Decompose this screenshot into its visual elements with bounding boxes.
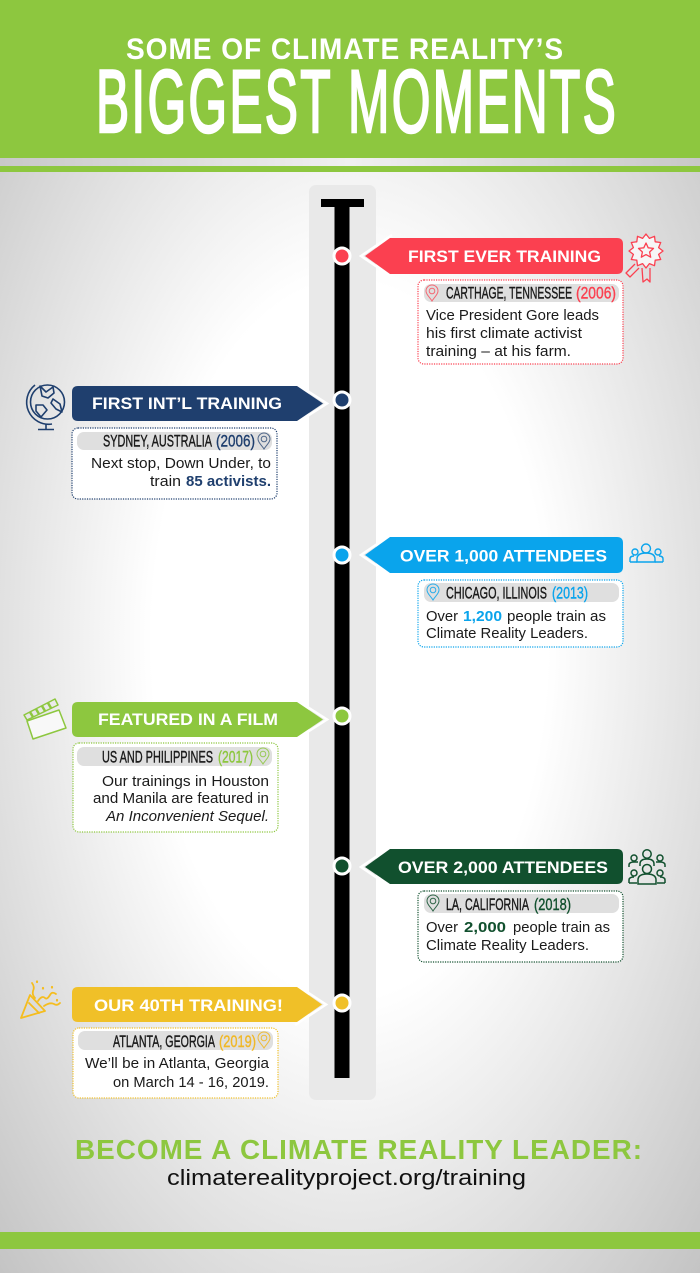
location pill xyxy=(424,894,619,913)
info box xyxy=(418,891,623,962)
location: SYDNEY, AUSTRALIA xyxy=(103,432,212,450)
description: people train as xyxy=(513,920,610,936)
description: his first climate activist xyxy=(426,326,582,342)
icon: map pin xyxy=(258,1032,270,1048)
banner: our 40th training xyxy=(72,984,326,1025)
banner: featured in a film xyxy=(72,699,327,740)
description: Our trainings in Houston xyxy=(102,774,269,790)
description xyxy=(426,308,599,360)
description: Over xyxy=(426,920,458,936)
description: and Manila are featured in xyxy=(93,791,269,807)
year: (2017) xyxy=(218,748,253,766)
call to action heading: BECOME A CLIMATE REALITY LEADER: xyxy=(75,1134,643,1165)
description xyxy=(426,920,610,954)
description xyxy=(93,774,269,825)
event: our 40th training xyxy=(21,982,350,1098)
banner heading: FIRST EVER TRAINING xyxy=(408,247,601,266)
timeline track xyxy=(309,185,376,1100)
description: on March 14 - 16, 2019. xyxy=(113,1075,269,1091)
banner: over 2,000 attendees xyxy=(361,846,623,888)
description: Next stop, Down Under, to xyxy=(91,456,271,472)
icon: award ribbon xyxy=(626,234,663,282)
description xyxy=(85,1056,270,1091)
description xyxy=(91,456,271,490)
timeline dot: blue xyxy=(334,547,350,563)
icon: map pin xyxy=(258,433,270,449)
location: CHICAGO, ILLINOIS xyxy=(446,584,547,602)
footer band xyxy=(0,1232,700,1249)
location pill xyxy=(77,747,272,766)
location: US AND PHILIPPINES xyxy=(102,748,213,766)
year: (2018) xyxy=(534,895,571,914)
event: over 2,000 attendees xyxy=(334,846,665,962)
icon: three people xyxy=(630,544,663,562)
timeline dot: green xyxy=(334,708,350,724)
description: 2,000 xyxy=(464,920,506,936)
description: An Inconvenient Sequel. xyxy=(105,809,269,825)
description: We’ll be in Atlanta, Georgia xyxy=(85,1056,270,1072)
icon: map pin xyxy=(426,285,438,301)
year: (2013) xyxy=(552,584,588,602)
event: first ever training xyxy=(334,234,663,364)
icon: map pin xyxy=(427,895,439,911)
header band xyxy=(0,0,700,172)
info box xyxy=(418,580,623,647)
location pill xyxy=(77,432,272,450)
icon: party popper xyxy=(21,982,60,1018)
year: (2006) xyxy=(576,284,616,302)
description: 85 activists. xyxy=(186,474,271,490)
icon: film clapperboard xyxy=(24,699,66,739)
year: (2019) xyxy=(219,1032,256,1051)
event: first international training xyxy=(27,383,350,499)
timeline dot: yellow xyxy=(334,995,350,1011)
description: Climate Reality Leaders. xyxy=(426,626,588,642)
info box xyxy=(73,1028,278,1098)
description: Vice President Gore leads xyxy=(426,308,599,324)
location: LA, CALIFORNIA xyxy=(446,895,529,914)
timeline dot: red xyxy=(334,248,350,264)
timeline dot: navy xyxy=(334,392,350,408)
location pill xyxy=(424,583,619,602)
banner: over 1,000 attendees xyxy=(361,534,623,576)
location pill xyxy=(78,1031,273,1050)
info box xyxy=(418,280,623,364)
banner heading: OVER 2,000 ATTENDEES xyxy=(398,858,608,877)
banner: first international training xyxy=(72,383,327,424)
location: CARTHAGE, TENNESSEE xyxy=(446,284,572,302)
info box xyxy=(72,428,277,499)
banner: first ever training xyxy=(361,235,623,277)
banner heading: FIRST INT’L TRAINING xyxy=(92,394,282,413)
title: SOME OF CLIMATE REALITY’S xyxy=(126,33,564,66)
location pill xyxy=(424,284,619,302)
event: featured in a film xyxy=(24,699,350,832)
description: train xyxy=(150,474,181,490)
description: Climate Reality Leaders. xyxy=(426,938,589,954)
icon: globe xyxy=(27,385,65,430)
banner heading: FEATURED IN A FILM xyxy=(98,710,278,729)
description: training – at his farm. xyxy=(426,344,571,360)
icon: crowd of people xyxy=(629,850,665,884)
timeline dot: dark green xyxy=(334,858,350,874)
year: (2006) xyxy=(216,432,255,450)
location: ATLANTA, GEORGIA xyxy=(113,1032,215,1051)
description: people train as xyxy=(507,609,606,625)
call to action url: climaterealityproject.org/training xyxy=(167,1165,526,1190)
description: Over xyxy=(426,609,458,625)
event: over 1,000 attendees xyxy=(334,534,663,647)
icon: map pin xyxy=(427,584,439,600)
description: 1,200 xyxy=(463,609,502,625)
info box xyxy=(73,743,278,832)
banner heading: OVER 1,000 ATTENDEES xyxy=(400,546,607,566)
description xyxy=(426,609,606,642)
banner heading: OUR 40TH TRAINING! xyxy=(94,996,283,1015)
icon: map pin xyxy=(257,748,269,764)
